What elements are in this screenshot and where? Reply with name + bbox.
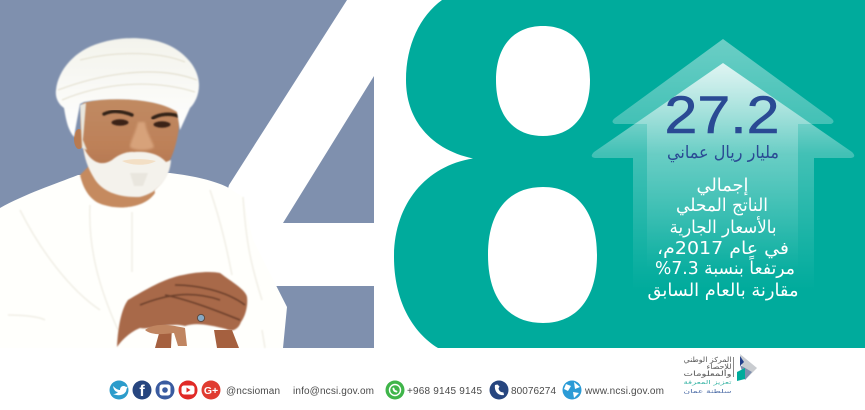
logo wordmark: سلطنة عمان bbox=[684, 389, 732, 395]
ring bbox=[197, 314, 205, 322]
description text: إجمالي bbox=[696, 176, 748, 196]
logo wordmark: للإحصاء bbox=[706, 363, 732, 371]
icon: twitter bbox=[110, 380, 128, 400]
robe folds bbox=[8, 190, 265, 348]
description text: مقارنة بالعام السابق bbox=[648, 281, 798, 301]
ear bbox=[74, 129, 84, 149]
logo wordmark: والمعلومات bbox=[684, 370, 732, 378]
logo divider bbox=[733, 357, 734, 377]
icon: google plus bbox=[202, 380, 220, 400]
phone number: 80076274 bbox=[511, 386, 556, 397]
logo wordmark: المركز الوطني bbox=[684, 356, 732, 364]
icon: whatsapp bbox=[386, 380, 404, 400]
icon: globe bbox=[562, 380, 582, 400]
icon: phone bbox=[490, 380, 508, 400]
description text: في عام 2017م، bbox=[657, 239, 789, 259]
clasped hands bbox=[117, 272, 247, 347]
icon: instagram bbox=[156, 380, 174, 400]
rising arrows graphic bbox=[592, 39, 854, 300]
turban bbox=[56, 38, 199, 137]
icon: google plus: G+ bbox=[204, 385, 218, 397]
sideburn bbox=[80, 103, 87, 150]
cane bbox=[155, 326, 239, 348]
eyes bbox=[112, 119, 170, 128]
mouth bbox=[122, 159, 156, 165]
face bbox=[81, 98, 180, 197]
robe bbox=[0, 173, 287, 348]
numeral 4 bbox=[200, 0, 374, 286]
whatsapp number: +968 9145 9145 bbox=[407, 386, 482, 397]
icon: facebook: f bbox=[139, 383, 145, 400]
social handle: @ncsioman bbox=[226, 386, 280, 397]
description text: الناتج المحلي bbox=[676, 196, 768, 216]
logo: national centre for statistics and information bbox=[684, 354, 757, 395]
description text: بالأسعار الجارية bbox=[670, 216, 776, 238]
website: www.ncsi.gov.om bbox=[584, 386, 664, 397]
neck bbox=[80, 165, 155, 207]
nose bbox=[130, 122, 154, 150]
description text bbox=[648, 176, 798, 301]
email: info@ncsi.gov.om bbox=[293, 386, 374, 397]
headline figure: 27.2 bbox=[664, 86, 780, 145]
back arrow bbox=[612, 39, 834, 300]
portrait illustration bbox=[0, 38, 287, 348]
front arrow bbox=[592, 63, 854, 300]
icon: youtube bbox=[178, 380, 198, 400]
icon: facebook bbox=[132, 380, 152, 400]
logo mark bbox=[737, 354, 757, 381]
logo wordmark bbox=[684, 356, 732, 395]
eyebrows bbox=[104, 111, 178, 118]
logo wordmark: تعزيز المعرفة bbox=[684, 380, 732, 386]
description text: مرتفعاً بنسبة 7.3% bbox=[655, 255, 795, 279]
numeral 8 in teal bbox=[394, 0, 865, 348]
footer contact bar bbox=[110, 380, 664, 400]
chin tuft bbox=[130, 173, 148, 186]
panel: blue-grey background with white numeral 4 bbox=[0, 0, 374, 348]
turban folds bbox=[58, 54, 197, 100]
beard and moustache bbox=[83, 145, 171, 197]
unit label: مليار ريال عماني bbox=[667, 143, 779, 163]
